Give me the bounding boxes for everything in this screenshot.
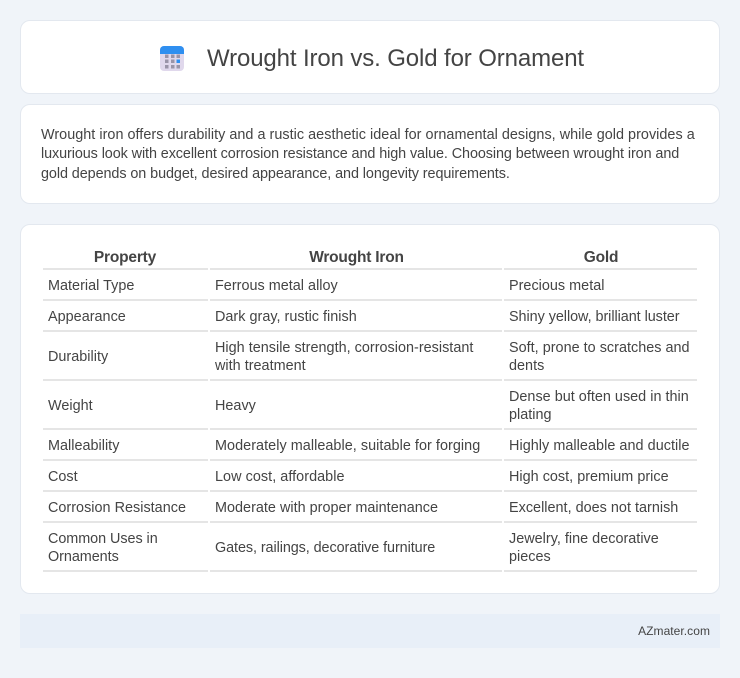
- intro text card: [20, 104, 720, 204]
- table header: [94, 249, 618, 266]
- table rows: Durability: [48, 349, 108, 365]
- table header: Gold: [584, 249, 618, 266]
- table rows: Appearance: [48, 309, 126, 325]
- footer bar: [20, 614, 720, 648]
- table rows: [43, 268, 697, 572]
- table rows: plating: [509, 407, 552, 423]
- table rows: Ferrous metal alloy: [215, 278, 338, 294]
- intro paragraph: gold depends on budget, desired appearance, and longevity requirements.: [41, 166, 510, 182]
- table rows: Gates, railings, decorative furniture: [215, 540, 435, 556]
- table rows: Material Type: [48, 278, 134, 294]
- table rows: High cost, premium price: [509, 469, 669, 485]
- title: Wrought Iron vs. Gold for Ornament: [207, 45, 584, 72]
- table rows: dents: [509, 358, 544, 374]
- table rows: Jewelry, fine decorative: [509, 531, 659, 547]
- intro paragraph: [41, 127, 695, 182]
- table rows: Precious metal: [509, 278, 604, 294]
- table rows: Moderate with proper maintenance: [215, 500, 438, 516]
- comparison table card: [20, 224, 720, 594]
- table header: Property: [94, 249, 156, 266]
- table rows: pieces: [509, 549, 551, 565]
- table rows: with treatment: [215, 358, 306, 374]
- table rows: Corrosion Resistance: [48, 500, 186, 516]
- footer credit: AZmater.com: [638, 624, 710, 638]
- table rows: Malleability: [48, 438, 119, 454]
- table rows: Dense but often used in thin: [509, 389, 689, 405]
- table rows: Low cost, affordable: [215, 469, 345, 485]
- title card: [20, 20, 720, 94]
- table rows: Shiny yellow, brilliant luster: [509, 309, 679, 325]
- table rows: Cost: [48, 469, 78, 485]
- icon: calendar: [160, 46, 184, 71]
- table rows: Weight: [48, 398, 93, 414]
- table rows: High tensile strength, corrosion-resistant: [215, 340, 473, 356]
- table rows: Moderately malleable, suitable for forging: [215, 438, 480, 454]
- table header: Wrought Iron: [309, 249, 404, 266]
- table rows: Soft, prone to scratches and: [509, 340, 690, 356]
- table rows: Ornaments: [48, 549, 119, 565]
- table rows: Dark gray, rustic finish: [215, 309, 357, 325]
- table rows: Highly malleable and ductile: [509, 438, 690, 454]
- intro paragraph: Wrought iron offers durability and a rustic aesthetic ideal for ornamental designs, while gold provides a: [41, 127, 695, 143]
- table rows: Excellent, does not tarnish: [509, 500, 678, 516]
- intro paragraph: luxurious look with excellent corrosion resistance and high value. Choosing between wrought iron and: [41, 146, 679, 162]
- table rows: Common Uses in: [48, 531, 158, 547]
- table rows: Heavy: [215, 398, 256, 414]
